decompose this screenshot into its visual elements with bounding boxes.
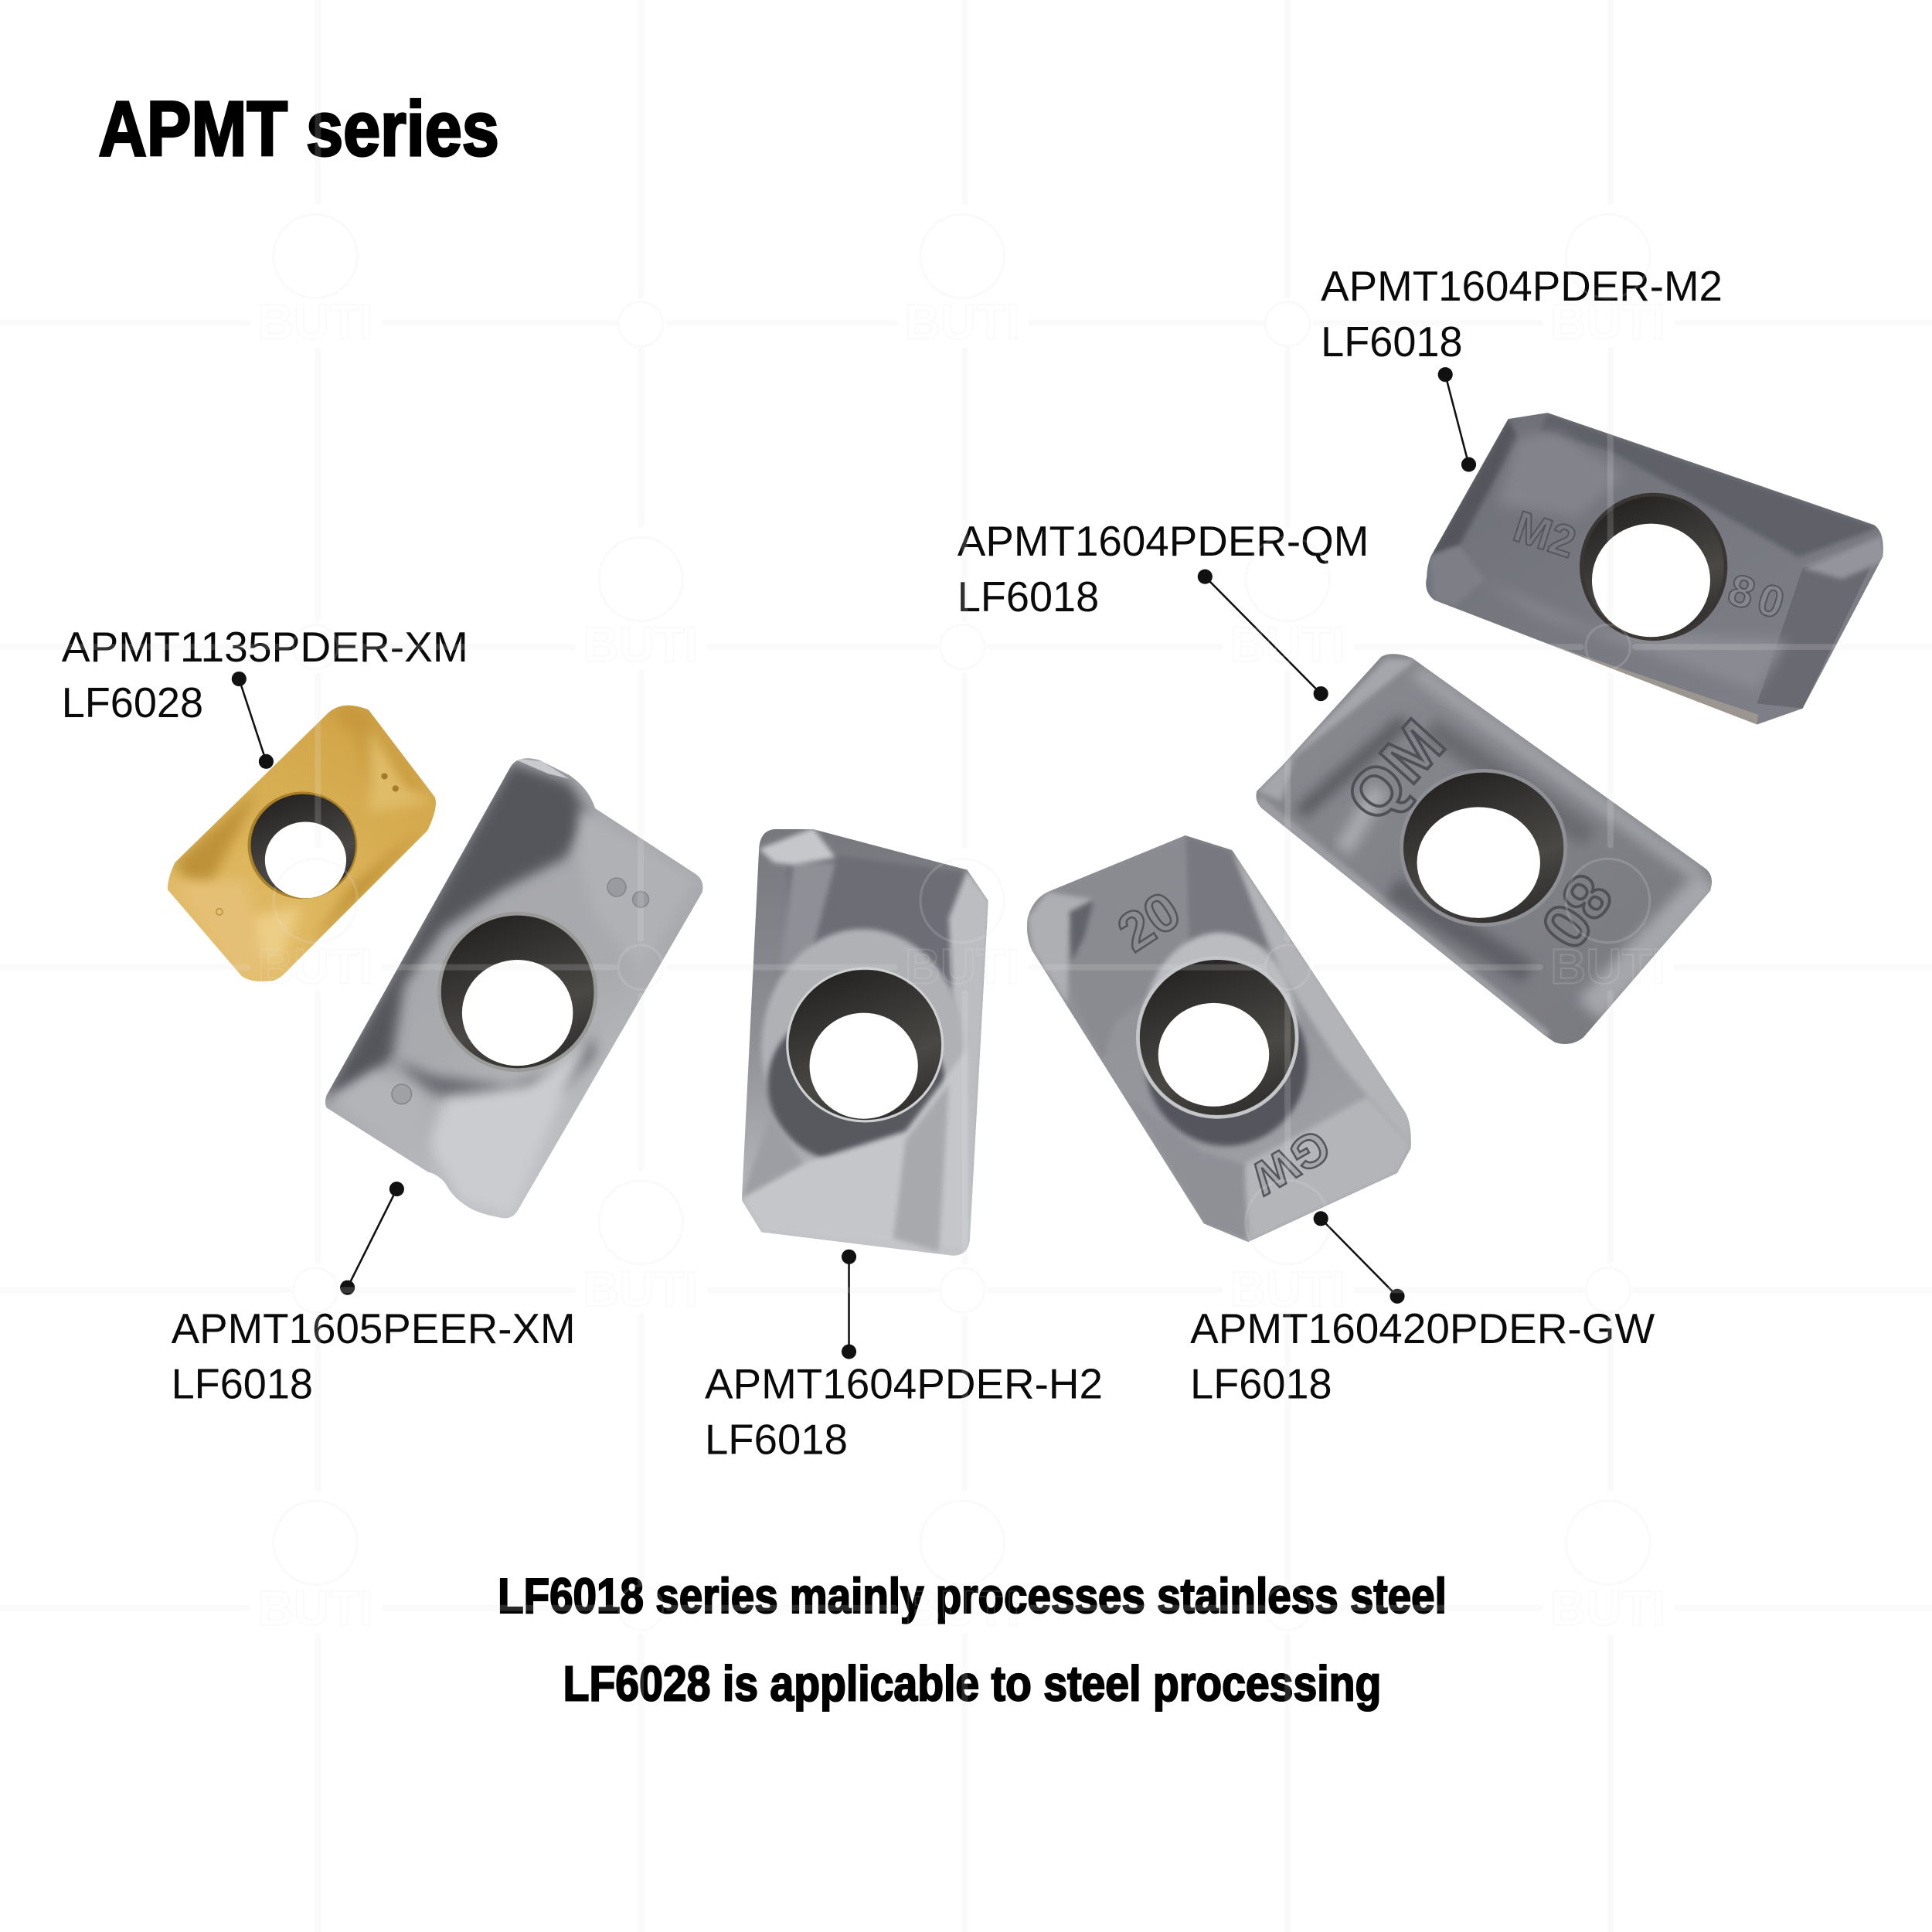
callout: GW	[1190, 1211, 1655, 1408]
watermark: BUTI	[905, 938, 1020, 994]
callout: XM gold: LF6028	[62, 679, 203, 726]
callout: M2	[1321, 262, 1723, 472]
callout: XM silver: APMT1605PEER-XM	[172, 1304, 576, 1352]
engraving: 80: 80	[1527, 862, 1627, 961]
watermark: BUTI	[258, 938, 373, 994]
callout: H2: APMT1604PDER-H2	[705, 1360, 1103, 1408]
insert: APMT1135PDER-XM gold	[160, 696, 444, 986]
insert: APMT160420PDER-GW	[1022, 831, 1417, 1250]
watermark: BUTI	[905, 1580, 1020, 1636]
watermark: BUTI	[583, 1261, 698, 1317]
callout: XM silver	[172, 1182, 576, 1408]
callout: QM: APMT1604PDER-QM	[957, 517, 1369, 565]
callout: M2: APMT1604PDER-M2	[1321, 262, 1723, 310]
callout: H2: LF6018	[705, 1415, 848, 1463]
text: LF6028 note: LF6028 is applicable to steel processing	[563, 1655, 1381, 1711]
insert: APMT1604PDER-QM	[1250, 648, 1719, 1049]
watermark: BUTI	[1550, 1580, 1665, 1636]
insert: APMT1604PDER-H2	[733, 823, 995, 1260]
callout: XM gold	[62, 623, 468, 769]
watermark: BUTI	[905, 294, 1020, 349]
insert: APMT1605PEER-XM	[321, 752, 709, 1226]
engraving: GW: GW	[1242, 1119, 1338, 1206]
watermark: BUTI	[583, 617, 698, 672]
watermark: BUTI	[1550, 294, 1665, 349]
watermark: BUTI	[258, 294, 373, 349]
watermark: BUTI	[1550, 938, 1665, 994]
callout: QM	[957, 517, 1369, 701]
engraving: QM: QM	[1332, 706, 1459, 835]
title: APMT series	[99, 86, 499, 172]
watermark: BUTI	[1230, 617, 1345, 672]
callout: GW: APMT160420PDER-GW	[1190, 1304, 1655, 1352]
engraving: M2: M2	[1508, 502, 1582, 568]
callout: H2	[705, 1250, 1103, 1463]
engraving: 80: 80	[1722, 565, 1796, 631]
insert: APMT1604PDER-M2	[1417, 406, 1891, 730]
callout: GW: LF6018	[1190, 1360, 1332, 1408]
callout: QM: LF6018	[957, 573, 1099, 621]
text: LF6018 note: LF6018 series mainly processes stainless steel	[498, 1568, 1447, 1624]
callout: M2: LF6018	[1321, 318, 1463, 366]
watermark: BUTI	[258, 1580, 373, 1636]
watermark: BUTI	[1230, 1261, 1345, 1317]
callout: XM gold: APMT1135PDER-XM	[62, 623, 468, 671]
engraving: 20: 20	[1107, 879, 1191, 963]
callout: XM silver: LF6018	[172, 1360, 313, 1408]
